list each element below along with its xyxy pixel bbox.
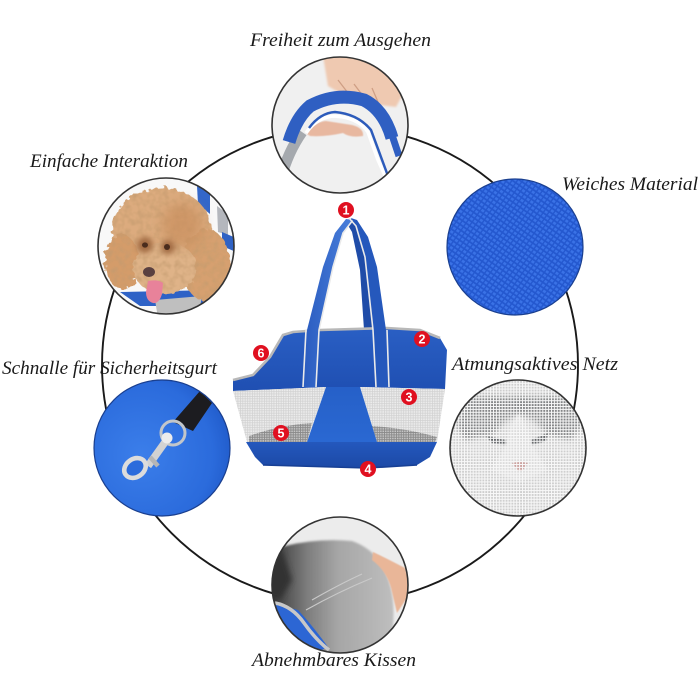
number badge 6: 6 xyxy=(258,346,265,360)
right mesh panel xyxy=(360,387,445,442)
number badge 3: 3 xyxy=(406,390,413,404)
label: lower right: Atmungsaktives Netz xyxy=(450,355,618,375)
label: lower left: Schnalle für Sicherheitsgurt xyxy=(2,359,218,379)
number badge 1: 1 xyxy=(343,204,350,218)
bag back handle shadow xyxy=(346,219,373,330)
number badge 5: 5 xyxy=(278,426,285,440)
number badge 3 xyxy=(401,389,417,405)
number badge 2: 2 xyxy=(419,332,426,346)
photo circle: cat behind mesh xyxy=(450,380,586,518)
right strap xyxy=(351,218,389,387)
center blue panel xyxy=(307,387,377,442)
bag top zip trim xyxy=(233,328,440,380)
photo circle: seatbelt buckle xyxy=(94,380,230,516)
large connecting ring xyxy=(102,127,578,603)
photo circle: removable cushion xyxy=(268,517,412,660)
left strap xyxy=(303,219,353,387)
label: upper left: Einfache Interaktion xyxy=(29,152,188,172)
left mesh panel xyxy=(233,387,326,442)
photo circle: poodle xyxy=(98,178,236,318)
number badge 1 xyxy=(338,202,354,218)
bag upper body xyxy=(233,328,447,391)
number badge 4: 4 xyxy=(365,462,372,476)
number badge 2 xyxy=(414,331,430,347)
bag base xyxy=(246,442,437,468)
carrier bag illustration xyxy=(233,218,447,468)
number badge 6 xyxy=(253,345,269,361)
photo circle: carry handles in hand xyxy=(272,54,408,193)
label: bottom: Abnehmbares Kissen xyxy=(250,651,416,671)
label: upper right: Weiches Material xyxy=(562,175,698,195)
photo circle: soft blue material xyxy=(447,179,583,315)
number badge 5 xyxy=(273,425,289,441)
label: top: Freiheit zum Ausgehen xyxy=(249,31,431,51)
number badge 4 xyxy=(360,461,376,477)
